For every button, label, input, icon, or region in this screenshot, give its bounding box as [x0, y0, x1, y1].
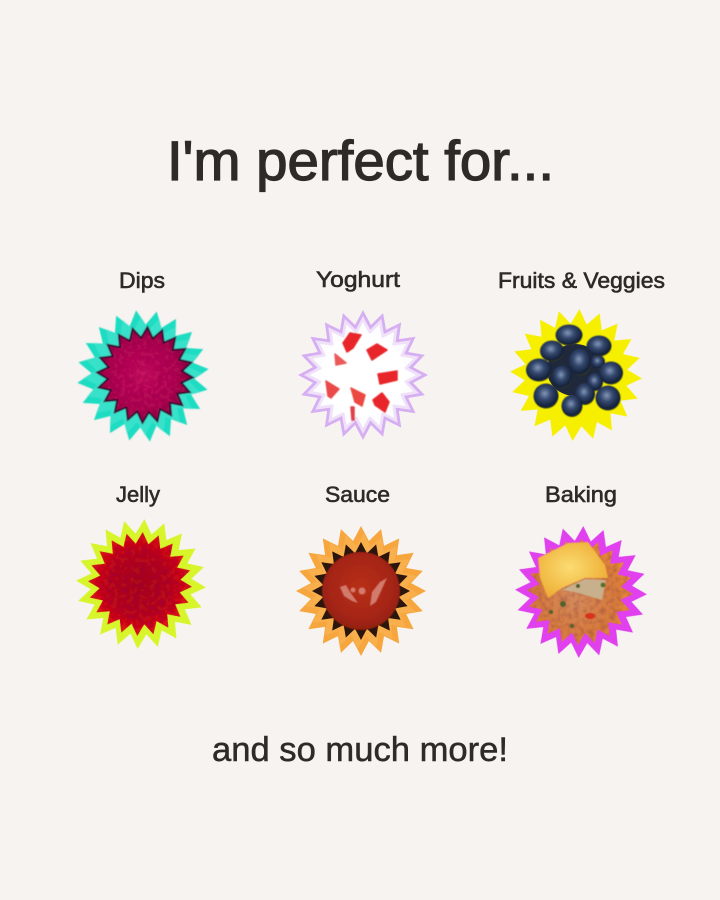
title: I'm perfect for...	[167, 129, 554, 192]
label: Fruits & Veggies: Fruits & Veggies	[498, 268, 665, 293]
label: Jelly: Jelly	[116, 482, 160, 507]
closing line: and so much more!	[212, 731, 508, 769]
cup: fruits and veggies	[507, 306, 645, 444]
label: Yoghurt: Yoghurt	[316, 267, 400, 292]
cup: yoghurt	[298, 310, 428, 440]
blueberries	[526, 324, 623, 417]
label: Baking: Baking	[545, 482, 617, 507]
label: Sauce: Sauce	[325, 482, 390, 507]
cup: sauce	[296, 526, 426, 656]
label: Dips: Dips	[119, 268, 165, 293]
sauce highlights	[340, 578, 387, 606]
cup: dips	[70, 303, 216, 449]
strawberry pieces	[326, 333, 397, 420]
pie crust	[538, 542, 608, 598]
cup: jelly	[73, 516, 209, 652]
pie filling	[549, 579, 606, 628]
cup: baking	[513, 524, 649, 660]
